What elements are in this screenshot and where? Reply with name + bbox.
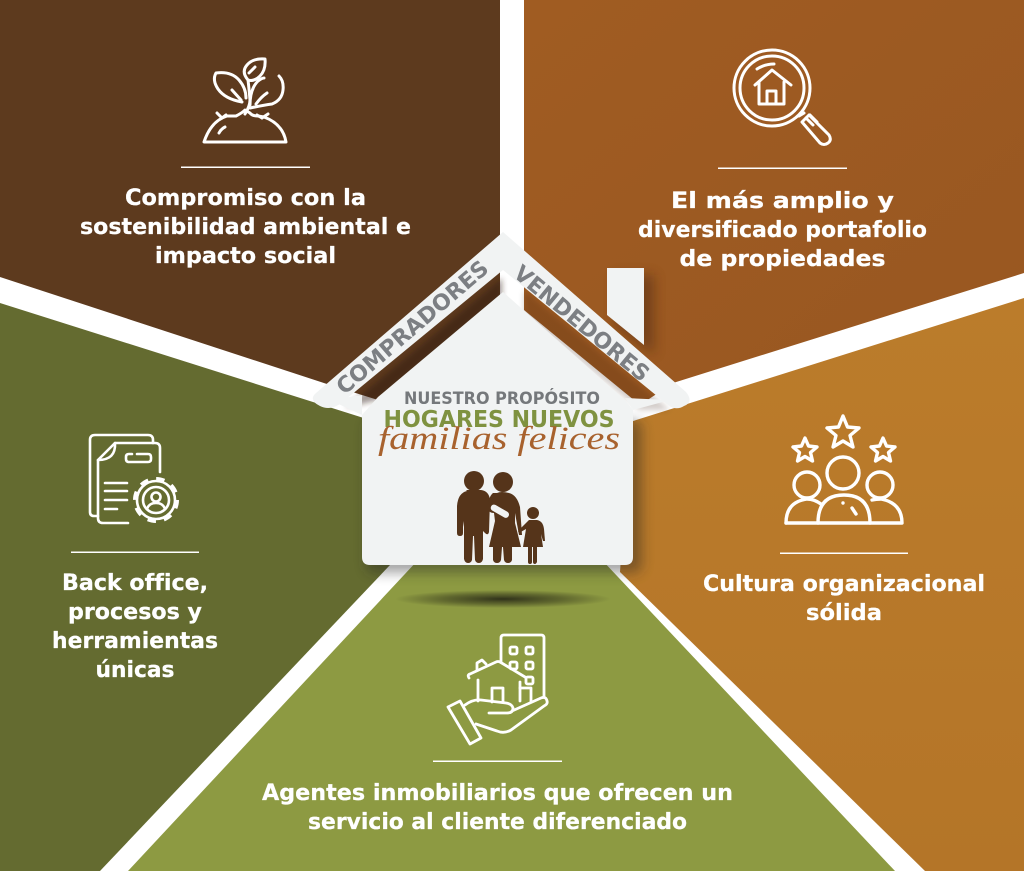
divider: agentes	[433, 760, 562, 762]
house eaves fill	[330, 395, 362, 415]
chimney	[607, 268, 644, 345]
icon: team with stars	[786, 416, 902, 523]
text: portafolio	[638, 188, 927, 272]
text: portafolio: El más amplio y	[671, 188, 894, 214]
text: agentes: servicio al cliente diferenciado	[308, 809, 687, 835]
text: back office	[52, 570, 218, 683]
panel: sostenibilidad	[0, 0, 500, 400]
panel: cultura organizacional	[620, 298, 1024, 871]
panel: back office	[0, 303, 390, 871]
text: cultura	[703, 571, 985, 626]
ground shadow	[395, 590, 611, 608]
text: agentes	[262, 780, 733, 835]
roof label: vendedores: VENDEDORES	[508, 261, 654, 387]
text: back office: procesos y	[68, 599, 202, 625]
text: agentes: Agentes inmobiliarios que ofrecen un	[262, 780, 733, 806]
text: back office: Back office,	[62, 570, 208, 596]
divider: cultura	[780, 552, 908, 554]
divider: sostenibilidad	[181, 166, 310, 168]
house body	[362, 292, 633, 565]
house shadow	[366, 420, 642, 573]
house heading: nuestro proposito: NUESTRO PROPÓSITO	[404, 387, 600, 409]
text: portafolio: de propiedades	[680, 246, 886, 272]
chimney shadow	[615, 275, 654, 355]
woman	[488, 472, 522, 563]
panel: agentes inmobiliarios	[128, 560, 895, 871]
text: sostenibilidad	[80, 185, 411, 269]
man	[457, 471, 490, 563]
text: back office: herramientas	[52, 628, 218, 654]
text: sostenibilidad: Compromiso con la	[125, 185, 366, 211]
icon: plant	[204, 59, 286, 142]
icon: hand holding house and building	[448, 635, 547, 744]
icon: magnifier with house	[734, 50, 830, 144]
roof shadow	[345, 278, 502, 408]
baby bundle	[490, 503, 510, 519]
family silhouette	[457, 471, 545, 564]
house heading: hogares nuevos: HOGARES NUEVOS	[384, 405, 614, 433]
house heading: familias felices: familias felices	[378, 421, 620, 457]
text: cultura: Cultura organizacional	[703, 571, 985, 597]
text: sostenibilidad: impacto social	[155, 243, 336, 269]
right roof shadow	[524, 290, 670, 410]
divider: back office	[71, 552, 199, 553]
text: cultura: sólida	[806, 600, 882, 626]
divider: portafolio	[718, 168, 847, 169]
icon: documents with gear	[90, 435, 176, 523]
panel: portafolio	[524, 0, 1024, 405]
right eave fill	[625, 398, 670, 410]
roof label: compradores: COMPRADORES	[332, 256, 494, 400]
text: portafolio: diversificado portafolio	[638, 217, 927, 243]
child	[518, 507, 545, 564]
text: back office: únicas	[96, 657, 174, 683]
text: sostenibilidad: sostenibilidad ambiental e	[80, 214, 411, 240]
roof band	[313, 232, 690, 408]
